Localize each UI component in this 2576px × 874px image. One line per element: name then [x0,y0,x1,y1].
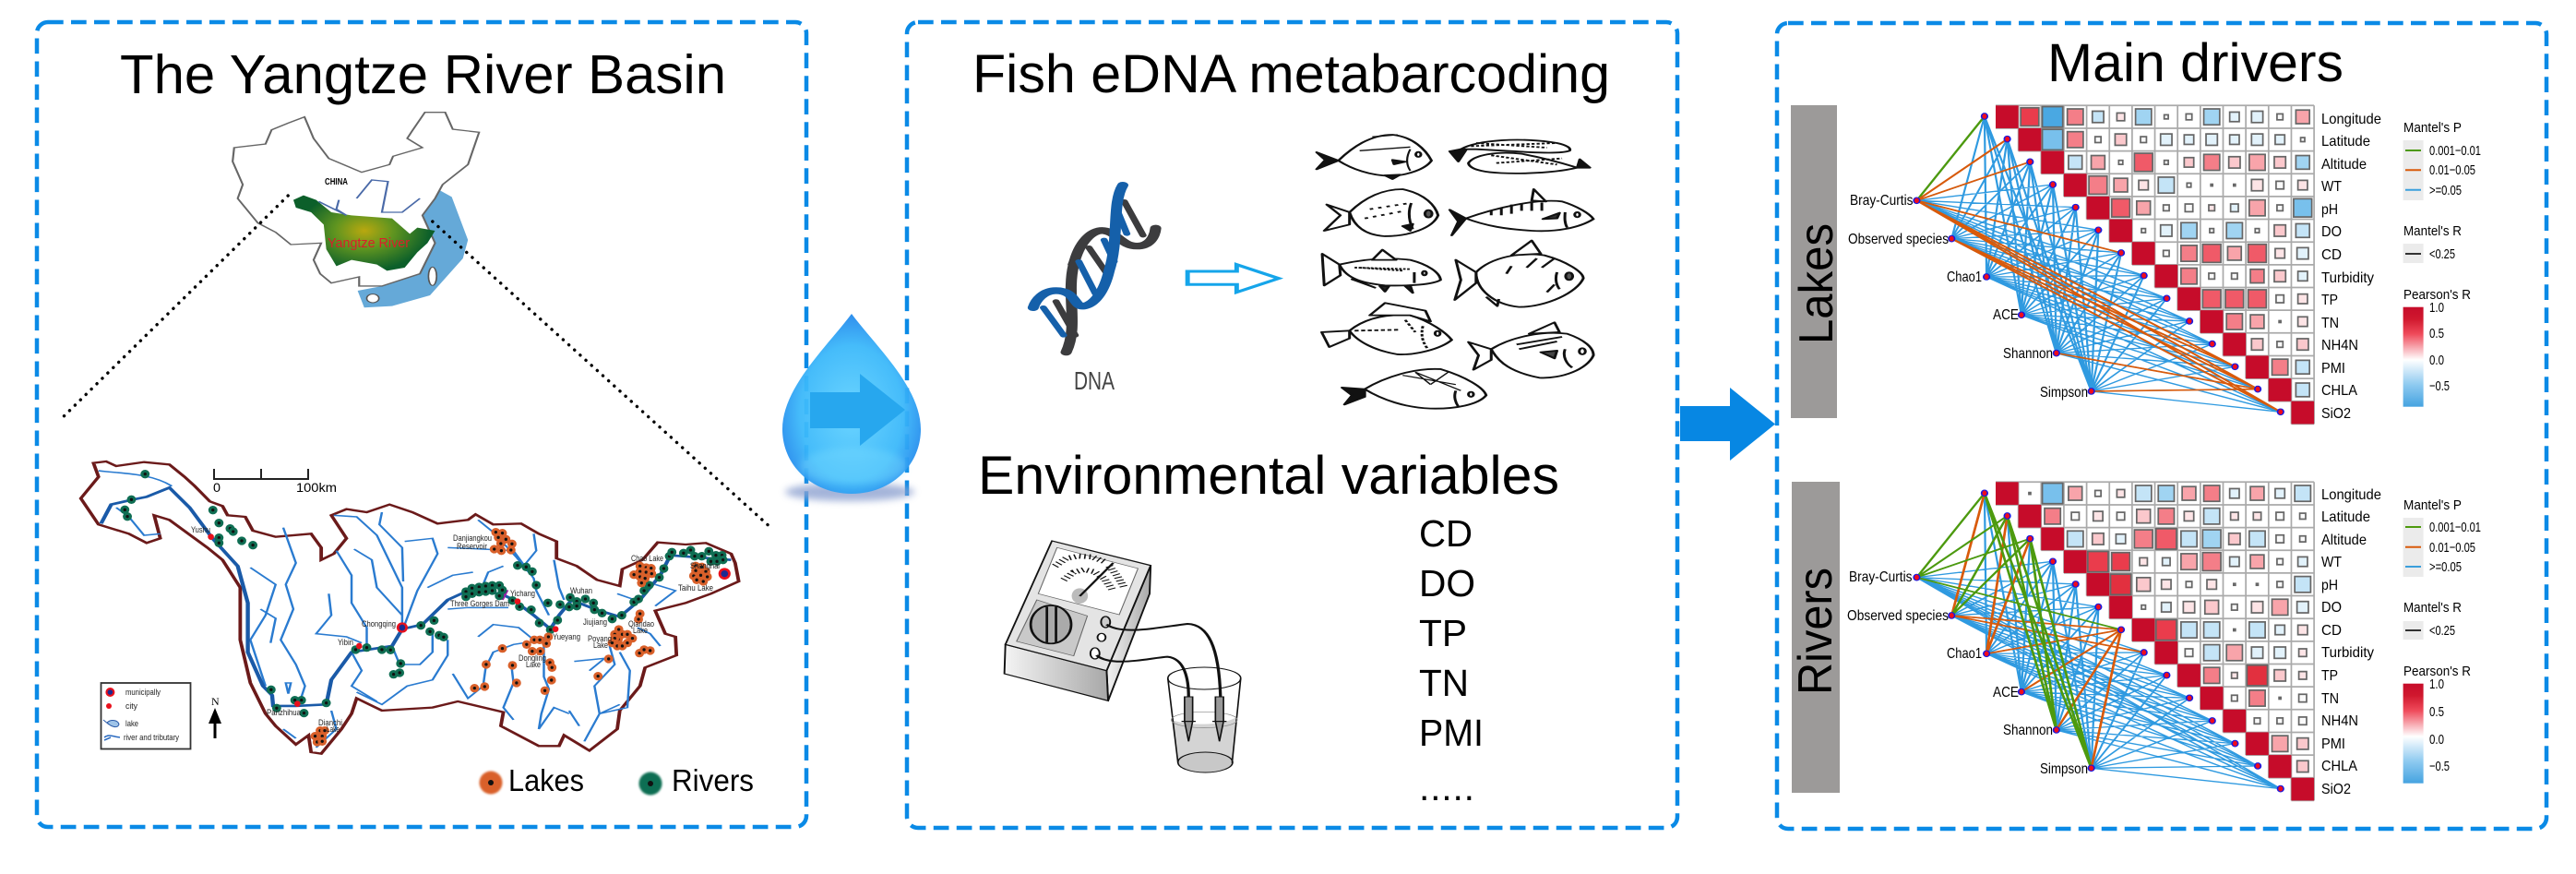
fish 2 [1449,140,1590,174]
legend: Lakes: Mantel's P [2403,120,2462,136]
labels: Rivers response metrics: Bray-Curtis [1849,569,1912,585]
city labels: Panzhihua [267,708,301,717]
city labels: Jiujiang [583,617,607,627]
China outline [233,113,479,286]
legend: Rivers: 0.001−0.01 [2429,520,2481,535]
legend: Rivers [638,763,754,797]
labels: Rivers response metrics: Shannon [2003,723,2053,738]
network: Rivers Mantel links [1914,490,2284,792]
river sites [120,470,728,717]
icons: fish [1317,135,1593,409]
legend: Lakes: <0.25 [2429,246,2455,262]
city labels [191,525,720,734]
legend: Rivers: Mantel's P [2403,497,2462,513]
fish 7 [1322,303,1451,354]
icon: water drop with arrow [782,314,921,501]
fish 9 [1342,369,1486,409]
legend: Rivers [2403,497,2481,784]
map: China locator [233,113,479,307]
legend: Rivers: <0.25 [2429,623,2455,639]
labels: Lakes environmental axes: pH [2321,202,2338,218]
city labels: Dongling [519,653,546,663]
legend: Rivers: Mantel's R [2403,600,2462,616]
labels: Lakes environmental axes: TN [2321,316,2339,331]
labels: Lakes environmental axes: CHLA [2321,383,2357,399]
tributaries [99,471,675,748]
basin boundary [81,461,739,754]
icon: DNA helix [1033,186,1156,353]
list: environmental variables: CD [1419,512,1473,555]
labels: Lakes environmental axes: NH4N [2321,338,2358,353]
panel: The Yangtze River Basin [37,22,806,827]
north arrow: N [211,695,220,708]
panel frame right [1777,23,2546,829]
fish 6 [1455,241,1583,307]
scale bar: 0 [213,480,221,495]
city labels: Wuhan [570,586,592,595]
labels: Lakes environmental axes: DO [2321,224,2342,240]
list: environmental variables: DO [1419,562,1475,605]
labels: Lakes response metrics: ACE [1993,307,2019,323]
map legend box [101,683,190,749]
labels: Rivers environmental axes: TN [2321,691,2339,707]
legend: Rivers: Rivers [672,763,754,797]
labels: Rivers response metrics: ACE [1993,685,2019,700]
city labels: Shanghai [690,561,720,570]
labels: Rivers response metrics: Chao1 [1947,646,1982,662]
city labels: Poyang [588,634,612,643]
labels: Lakes environmental axes: Altitude [2321,157,2367,173]
legend: Rivers: Pearson's R [2403,664,2471,679]
legend: Rivers: >=0.05 [2429,559,2462,575]
fish 8 [1469,322,1593,377]
city labels: Yichang [510,589,535,598]
city markers [208,533,731,707]
list: environmental variables: TN [1419,662,1469,704]
labels: Rivers environmental axes: Latitude [2321,509,2370,525]
city labels: Lake [327,724,340,734]
heatmap: Rivers correlation matrix [1996,482,2314,800]
city labels: Chao Lake [631,554,663,563]
labels: Lakes response metrics: Shannon [2003,346,2053,362]
city labels: Chongqing [362,619,396,629]
labels: Rivers environmental axes: SiO2 [2321,782,2351,797]
dam mark [502,590,507,600]
labels: Rivers environmental axes: pH [2321,578,2338,593]
side bar: Rivers: Rivers [1789,568,1843,695]
legend: Lakes: −0.5 [2429,378,2450,394]
labels: Lakes environmental axes: TP [2321,293,2338,308]
fish 1 [1317,135,1432,179]
title: Fish eDNA metabarcoding: Fish eDNA metabarcoding [972,44,1610,104]
labels: Lakes response metrics: Bray-Curtis [1850,193,1914,209]
city labels: Lake [593,641,608,650]
city labels: Danjiangkou [453,533,492,543]
title: Main drivers: Main drivers [2047,33,2343,93]
city labels: Qiandao [628,619,654,629]
fish 4 [1449,189,1593,235]
list: environmental variables: ..... [1419,766,1474,808]
labels: Rivers environmental axes: PMI [2321,736,2345,752]
legend: Lakes [2403,120,2481,407]
legend: Lakes: 0.01−0.05 [2429,162,2475,178]
legend: Lakes: Pearson's R [2403,287,2471,303]
labels: Rivers environmental axes: TP [2321,668,2338,684]
scale bar: 100km [296,480,337,495]
city labels: Dianchi [318,718,342,727]
Yangtze basin area [293,196,435,270]
labels: Rivers environmental axes: Altitude [2321,533,2367,548]
labels: Lakes environmental axes [2321,112,2381,422]
legend: Lakes: Mantel's R [2403,223,2462,239]
city labels: Reservoir [457,542,487,551]
city labels: Yushu [191,525,210,534]
list: environmental variables: TP [1419,612,1467,654]
network: Lakes Mantel links [1914,114,2284,415]
labels: Rivers response metrics [1847,569,2088,777]
labels: Lakes environmental axes: PMI [2321,361,2345,377]
label: DNA: DNA [1074,366,1115,395]
labels: Rivers response metrics: Observed species [1847,608,1949,624]
Yellow river [318,180,420,215]
labels: Rivers environmental axes: WT [2321,555,2342,570]
labels: Lakes response metrics: Observed species [1848,232,1949,247]
label: Yangtze River: Yangtze River [328,235,410,251]
legend: Rivers: 0.5 [2429,704,2444,720]
legend: Lakes: 1.0 [2429,300,2444,316]
city labels: Taihu Lake [678,583,713,593]
fish 5 [1322,250,1440,293]
map legend box: city [125,701,137,711]
dotted zoom lines [65,196,769,526]
legend: Lakes [480,763,584,797]
lake sites [311,528,712,747]
legend: Lakes: 0.001−0.01 [2429,143,2481,159]
legend: Rivers: 0.01−0.05 [2429,540,2475,556]
labels: Lakes environmental axes: CD [2321,247,2342,263]
panel: Fish eDNA metabarcoding and environmental variables [907,22,1677,828]
labels: Lakes environmental axes: WT [2321,179,2342,195]
icon: conductivity meter and beaker [1005,541,1241,772]
city labels: Three Gorges Dam [450,599,509,608]
labels: Lakes environmental axes: Longitude [2321,112,2381,127]
labels: Lakes response metrics: Simpson [2040,385,2088,401]
legend: Lakes: 0.5 [2429,326,2444,341]
title: The Yangtze River Basin: The Yangtze River Basin [120,43,726,105]
map legend box: municipally [125,688,161,697]
main stem [101,487,731,706]
labels: Lakes environmental axes: SiO2 [2321,406,2351,422]
legend: Rivers: 0.0 [2429,732,2444,748]
legend: Lakes: >=0.05 [2429,183,2462,198]
city labels: Yibin [338,638,353,647]
labels: Rivers environmental axes: DO [2321,600,2342,616]
labels: Rivers environmental axes: Longitude [2321,487,2381,503]
labels: Lakes environmental axes: Latitude [2321,134,2370,150]
panel frame left [37,22,806,827]
city labels: Yueyang [553,632,580,641]
labels: Rivers environmental axes: Turbidity [2321,645,2374,661]
city labels: Lake [633,626,648,635]
fish 3 [1324,189,1438,236]
labels: Lakes environmental axes: Turbidity [2321,270,2374,286]
panel frame middle [907,22,1677,828]
heading: Environmental variables: Environmental variables [978,446,1559,506]
labels: Rivers response metrics: Simpson [2040,761,2088,777]
arrow: hollow [1187,265,1279,293]
labels: Rivers environmental axes: CHLA [2321,759,2357,774]
city labels: Lake [526,660,541,669]
labels: Rivers environmental axes [2321,487,2381,797]
labels: Lakes response metrics [1848,193,2088,401]
heatmap: Lakes correlation matrix [1996,105,2314,424]
label: CHINA: CHINA [325,176,348,187]
labels: Rivers environmental axes: NH4N [2321,713,2358,729]
map legend box: river and tributary [124,733,179,742]
map: Yangtze basin rivers and sampling sites [81,461,739,754]
side bar: Lakes: Lakes [1790,223,1843,344]
legend: Lakes: 0.0 [2429,353,2444,368]
arrow: to main drivers [1680,388,1775,461]
legend: Lakes: Lakes [508,763,584,797]
sea region [358,180,468,307]
legend: Rivers: 1.0 [2429,676,2444,692]
list: environmental variables: PMI [1419,712,1484,754]
list: environmental variables [1419,512,1484,808]
legend: Rivers: −0.5 [2429,759,2450,774]
islands [366,267,436,303]
panel: Main drivers [1777,23,2546,829]
labels: Lakes response metrics: Chao1 [1947,269,1982,285]
side bar: Lakes [1790,105,1843,418]
north arrow [209,695,221,738]
map legend box: lake [125,719,138,728]
labels: Rivers environmental axes: CD [2321,623,2342,639]
side bar: Rivers [1789,482,1843,793]
scale bar [213,469,337,495]
